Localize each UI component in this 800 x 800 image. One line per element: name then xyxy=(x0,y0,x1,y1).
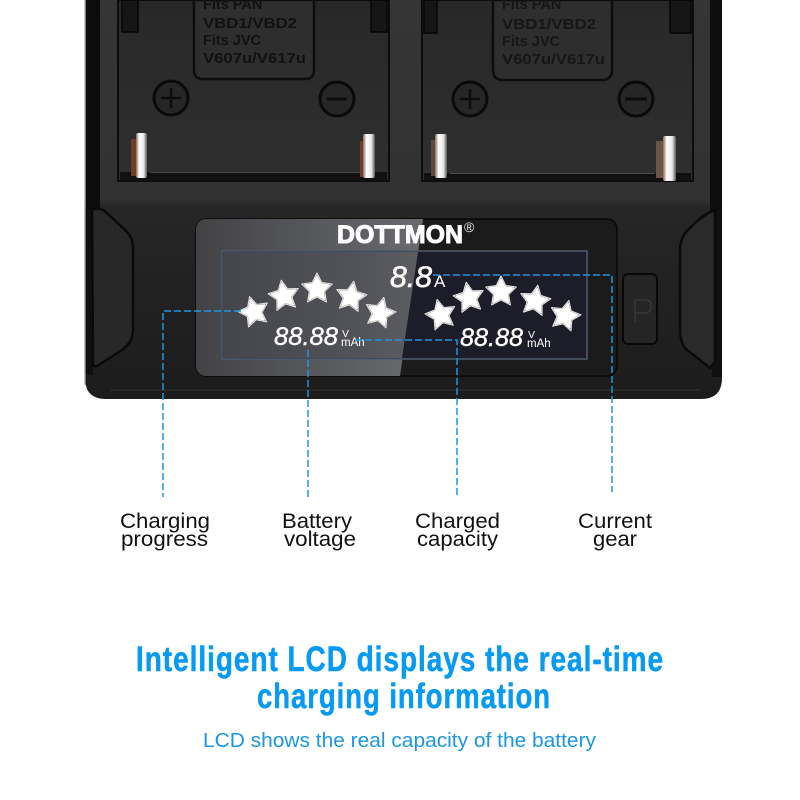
charger body xyxy=(84,0,722,399)
side grip: right xyxy=(680,210,715,368)
left reading: mAh xyxy=(341,337,365,349)
LCD display xyxy=(196,219,617,376)
label: charging progress xyxy=(120,510,210,551)
leader line: current gear xyxy=(433,275,612,492)
current reading: A xyxy=(434,272,446,291)
stars: left battery xyxy=(235,273,399,329)
label: battery voltage: Battery xyxy=(282,510,353,533)
battery slot: right xyxy=(422,0,693,181)
label: charging progress: progress xyxy=(121,528,208,551)
right reading: V xyxy=(528,329,535,341)
label: current gear: gear xyxy=(593,528,637,551)
metal contact pins xyxy=(131,133,375,178)
title xyxy=(136,640,664,716)
battery model plate: VBD1/VBD2 xyxy=(502,17,596,33)
battery model plate: V607u/V617u xyxy=(203,51,306,67)
icon: plus terminal xyxy=(154,81,188,115)
stars: right battery xyxy=(422,276,584,332)
glass reflection xyxy=(196,219,423,376)
battery model plate xyxy=(194,0,314,79)
battery model plate: V607u/V617u xyxy=(502,52,605,68)
inner screen xyxy=(222,251,587,359)
left reading: 88.88 xyxy=(274,323,338,351)
right reading xyxy=(460,324,551,352)
subtitle: LCD shows the real capacity of the battery xyxy=(203,730,596,752)
label: battery voltage: voltage xyxy=(284,528,356,551)
brand logo: DOTTMON xyxy=(337,221,463,249)
label: charged capacity: capacity xyxy=(417,528,499,551)
label: charged capacity xyxy=(415,510,500,551)
battery model plate: Fits JVC xyxy=(502,34,561,50)
side grip: left xyxy=(92,209,133,366)
P button xyxy=(623,274,657,344)
right reading: mAh xyxy=(527,338,551,350)
battery model plate: VBD1/VBD2 xyxy=(203,16,297,32)
leader line: battery voltage xyxy=(307,350,309,499)
icon: plus terminal xyxy=(453,82,487,116)
title: Intelligent LCD displays the real-time xyxy=(136,640,664,679)
title: charging information xyxy=(257,677,551,716)
label: charging progress: Charging xyxy=(120,510,210,533)
icon: minus terminal xyxy=(320,82,354,116)
label: current gear: Current xyxy=(578,510,652,533)
registered mark: ® xyxy=(464,219,475,235)
label: current gear xyxy=(578,510,652,551)
metal contact pins xyxy=(431,134,676,181)
left reading xyxy=(274,323,365,351)
left reading: V xyxy=(342,328,349,340)
leader line: charged capacity xyxy=(355,340,457,497)
leader line: charging progress xyxy=(163,311,241,497)
battery slot: left xyxy=(118,0,389,181)
label: battery voltage xyxy=(282,510,356,551)
right reading: 88.88 xyxy=(460,324,523,352)
battery model plate: Fits JVC xyxy=(203,33,262,49)
battery model plate xyxy=(493,0,612,80)
label: charged capacity: Charged xyxy=(415,510,500,533)
current reading: 8.8 xyxy=(390,261,432,294)
icon: minus terminal xyxy=(619,82,653,116)
